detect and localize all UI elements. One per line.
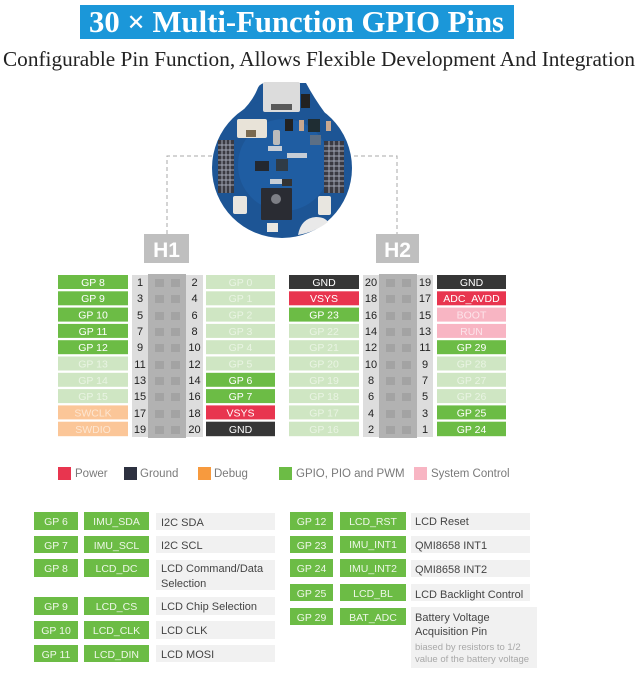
panel: right pin function table bbox=[290, 512, 537, 668]
panel: H2 pinout: 12 bbox=[365, 342, 377, 354]
panel: H2 pinout: GP 18 bbox=[309, 391, 339, 403]
panel: left pin function table: I2C SDA bbox=[161, 517, 204, 529]
panel: H2 pinout: 14 bbox=[365, 326, 377, 338]
panel: H2 pinout: 6 bbox=[368, 391, 374, 403]
panel: H1 pinout: 3 bbox=[137, 293, 143, 305]
panel: left pin function table: LCD_CS bbox=[96, 601, 137, 613]
panel: H1 pinout: GP 12 bbox=[78, 342, 108, 354]
panel: H2 pinout: 10 bbox=[365, 359, 377, 371]
usb-c connector bbox=[263, 82, 300, 112]
panel: H2 pinout: GP 20 bbox=[309, 358, 339, 370]
panel: H2 pinout: GP 17 bbox=[309, 408, 339, 420]
panel: H2 pinout: GP 25 bbox=[457, 408, 486, 420]
panel: right pin function table: QMI8658 INT2 bbox=[415, 564, 487, 576]
panel: H2 pinout: 20 bbox=[365, 277, 377, 289]
H1 label: H1 bbox=[153, 239, 180, 262]
panel: H2 pinout: GP 27 bbox=[457, 375, 486, 387]
panel: H1 pinout: SWCLK bbox=[74, 408, 112, 420]
panel: H1 pinout: GND bbox=[229, 424, 253, 436]
title banner: 30 × Multi-Function GPIO Pins bbox=[89, 4, 504, 39]
panel: left pin function table bbox=[34, 512, 275, 662]
panel: H1 pinout: GP 10 bbox=[78, 310, 108, 322]
panel: H2 pinout: GP 29 bbox=[457, 342, 486, 354]
panel: H1 pinout: 18 bbox=[188, 408, 201, 420]
panel: left pin function table: IMU_SCL bbox=[94, 540, 139, 552]
legend: System Control bbox=[431, 468, 510, 480]
panel: H2 pinout: GP 16 bbox=[309, 424, 339, 436]
panel: H1 pinout: 17 bbox=[134, 408, 146, 420]
legend bbox=[58, 467, 510, 480]
panel: H2 pinout: 7 bbox=[422, 375, 428, 387]
panel: right pin function table: GP 12 bbox=[297, 516, 326, 528]
legend: GPIO, PIO and PWM bbox=[296, 468, 405, 480]
panel: left pin function table: IMU_SDA bbox=[93, 516, 140, 528]
panel: H1 pinout: GP 15 bbox=[78, 391, 108, 403]
panel: H2 pinout: 3 bbox=[422, 408, 428, 420]
panel: left pin function table: LCD CLK bbox=[161, 625, 208, 637]
panel: H1 pinout: 2 bbox=[191, 277, 198, 289]
panel: right pin function table: LCD Reset bbox=[415, 516, 469, 528]
panel: H2 pinout: 19 bbox=[419, 277, 431, 289]
panel: H2 pinout: 9 bbox=[422, 359, 428, 371]
connector lines from board to H1 and H2 bbox=[167, 156, 397, 234]
panel: right pin function table: GP 25 bbox=[297, 588, 326, 600]
panel: H1 pinout: GP 6 bbox=[229, 375, 253, 387]
subtitle: Configurable Pin Function, Allows Flexible Development And Integration bbox=[3, 47, 636, 71]
panel: H1 pinout: 10 bbox=[188, 342, 201, 354]
panel: left pin function table: LCD_DC bbox=[95, 563, 138, 575]
panel: left pin function table: GP 10 bbox=[41, 625, 71, 637]
panel: H2 pinout: 17 bbox=[419, 293, 431, 305]
panel: H1 pinout: 9 bbox=[137, 342, 143, 354]
panel: right pin function table: GP 24 bbox=[297, 563, 326, 575]
panel: H1 pinout: 7 bbox=[137, 326, 143, 338]
panel: H1 pinout: VSYS bbox=[226, 408, 255, 420]
panel: H2 pinout: 4 bbox=[368, 408, 374, 420]
legend: Debug bbox=[214, 468, 248, 480]
panel: H2 pinout: 15 bbox=[419, 310, 431, 322]
panel: H1 pinout: 12 bbox=[188, 359, 201, 371]
panel: H2 pinout: GP 24 bbox=[457, 424, 486, 436]
panel: H2 pinout: VSYS bbox=[310, 293, 338, 305]
panel: right pin function table: BAT_ADC bbox=[349, 612, 397, 624]
panel: right pin function table: biased by resistors to 1/2 bbox=[415, 642, 521, 653]
header H1 on board bbox=[218, 140, 234, 193]
panel: H2 pinout: GP 22 bbox=[309, 326, 339, 338]
panel: left pin function table: GP 9 bbox=[44, 601, 68, 613]
panel: left pin function table: GP 8 bbox=[44, 563, 68, 575]
components bbox=[255, 161, 269, 171]
H2 label bbox=[376, 234, 419, 263]
panel: H2 pinout: 1 bbox=[422, 424, 428, 436]
icon: round circuit board bbox=[212, 82, 352, 238]
panel: H2 pinout: GND bbox=[312, 277, 336, 289]
panel: H2 pinout: GP 26 bbox=[457, 391, 486, 403]
panel: H1 pinout: GP 13 bbox=[78, 358, 108, 370]
panel: H1 pinout: GP 3 bbox=[229, 326, 253, 338]
panel: H2 pinout: GP 23 bbox=[309, 310, 339, 322]
panel: left pin function table: LCD_CLK bbox=[93, 625, 140, 637]
panel: H2 pinout: 16 bbox=[365, 310, 377, 322]
panel: H2 pinout: GND bbox=[460, 277, 484, 289]
panel: H1 pinout bbox=[58, 274, 275, 438]
legend: Power bbox=[75, 468, 108, 480]
panel: right pin function table: IMU_INT1 bbox=[349, 539, 397, 551]
H2 label: H2 bbox=[384, 239, 411, 262]
panel: H1 pinout: 6 bbox=[191, 310, 198, 322]
panel: right pin function table: IMU_INT2 bbox=[349, 563, 397, 575]
panel: left pin function table: I2C SCL bbox=[161, 540, 203, 552]
panel: H1 pinout: GP 5 bbox=[229, 358, 253, 370]
panel: H2 pinout: 18 bbox=[365, 293, 377, 305]
panel: H1 pinout: GP 0 bbox=[229, 277, 253, 289]
panel: H2 pinout: GP 19 bbox=[309, 375, 339, 387]
panel: H2 pinout bbox=[289, 274, 506, 438]
panel: H2 pinout: ADC_AVDD bbox=[443, 293, 500, 305]
panel: H2 pinout: 5 bbox=[422, 391, 428, 403]
panel: H2 pinout: BOOT bbox=[457, 310, 487, 322]
panel: right pin function table: LCD Backlight Control bbox=[415, 589, 523, 601]
panel: H2 pinout: 8 bbox=[368, 375, 374, 387]
panel: H2 pinout: 2 bbox=[368, 424, 374, 436]
panel: H1 pinout: GP 11 bbox=[79, 326, 108, 338]
panel: H1 pinout: 14 bbox=[188, 375, 201, 387]
panel: H1 pinout: 11 bbox=[134, 359, 146, 371]
panel: H1 pinout: 19 bbox=[134, 424, 146, 436]
panel: H1 pinout: SWDIO bbox=[75, 424, 111, 436]
panel: H2 pinout: RUN bbox=[460, 326, 483, 338]
panel: H2 pinout: GP 21 bbox=[309, 342, 339, 354]
panel: right pin function table: Acquisition Pin bbox=[415, 626, 487, 638]
battery connector bbox=[237, 119, 267, 138]
panel: H1 pinout: 4 bbox=[191, 293, 198, 305]
rp2350 chip bbox=[261, 188, 292, 220]
panel: H1 pinout: GP 8 bbox=[81, 277, 105, 289]
panel: left pin function table: GP 6 bbox=[44, 516, 68, 528]
panel: left pin function table: LCD Chip Selection bbox=[161, 601, 257, 613]
panel: H1 pinout: GP 9 bbox=[81, 293, 105, 305]
panel: H2 pinout: GP 28 bbox=[457, 358, 486, 370]
panel: H1 pinout: GP 4 bbox=[229, 342, 253, 354]
panel: left pin function table: LCD MOSI bbox=[161, 649, 214, 661]
legend: Ground bbox=[140, 468, 178, 480]
panel: H1 pinout: GP 2 bbox=[229, 310, 253, 322]
panel: H1 pinout: GP 1 bbox=[229, 293, 253, 305]
panel: right pin function table: LCD_BL bbox=[353, 588, 393, 600]
panel: left pin function table: LCD Command/Data bbox=[161, 563, 264, 575]
H1 label bbox=[144, 234, 189, 263]
panel: H1 pinout: 8 bbox=[191, 326, 198, 338]
panel: right pin function table: LCD_RST bbox=[349, 516, 398, 528]
panel: H1 pinout: 5 bbox=[137, 310, 143, 322]
panel: right pin function table: GP 29 bbox=[297, 612, 326, 624]
panel: left pin function table: GP 7 bbox=[44, 540, 68, 552]
panel: right pin function table: Battery Voltage bbox=[415, 612, 490, 624]
panel: right pin function table: GP 23 bbox=[297, 540, 326, 552]
panel: H1 pinout: 15 bbox=[134, 391, 146, 403]
panel: right pin function table: QMI8658 INT1 bbox=[415, 540, 487, 552]
panel: H2 pinout: 11 bbox=[419, 342, 431, 354]
panel: H1 pinout: 1 bbox=[137, 277, 143, 289]
panel: H1 pinout: 16 bbox=[188, 391, 201, 403]
panel: H2 pinout: 13 bbox=[419, 326, 431, 338]
buttons bbox=[233, 196, 247, 214]
panel: H1 pinout: 13 bbox=[134, 375, 146, 387]
header H2 on board bbox=[324, 141, 344, 193]
panel: H1 pinout: GP 14 bbox=[78, 375, 108, 387]
panel: left pin function table: GP 11 bbox=[42, 649, 71, 661]
panel: right pin function table: value of the battery voltage bbox=[415, 654, 529, 665]
panel: left pin function table: LCD_DIN bbox=[94, 649, 139, 661]
panel: left pin function table: Selection bbox=[161, 578, 206, 590]
panel: H1 pinout: GP 7 bbox=[229, 391, 253, 403]
panel: H1 pinout: 20 bbox=[188, 424, 201, 436]
